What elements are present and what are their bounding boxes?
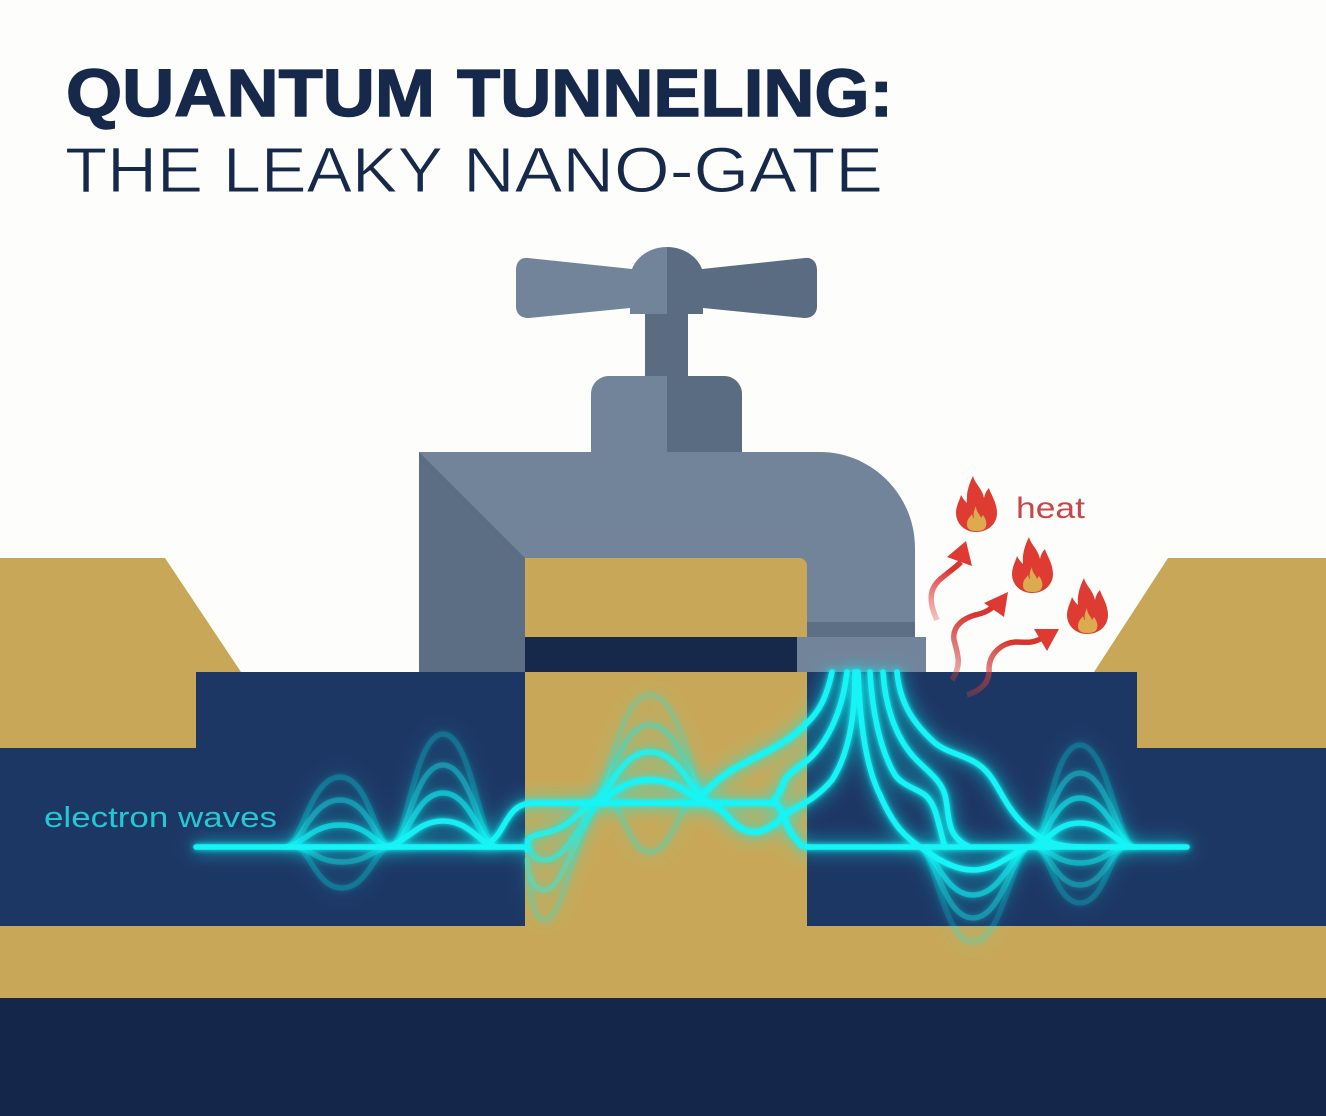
title line 2: THE [65,134,203,206]
gold layer [0,926,1326,998]
handle right [667,247,817,318]
label: electron waves: electron waves [44,802,277,834]
navy right region [807,672,1326,926]
bonnet [591,376,667,454]
right wave packet [807,745,1187,942]
heat arrows [931,541,1059,695]
title line 1: TUNNELING: [457,56,893,131]
bonnet shaded [667,376,742,454]
heat arrow 1 [931,541,972,620]
spout nozzle [797,637,926,672]
gold central barrier [525,672,807,926]
gate oxide slot [525,637,798,672]
heat arrow 2 [952,592,1008,680]
electron waves [196,672,1187,942]
icon: flame 2 [1012,537,1053,593]
heat arrow 3 [967,629,1059,695]
title line 2: NANO-GATE [463,134,883,206]
dark base layer [0,998,1326,1116]
title [65,56,893,206]
gold left contact [0,558,241,748]
substrate layers [0,558,1326,1116]
title line 1 [66,56,893,131]
title line 2: LEAKY [223,134,443,206]
handle left [516,247,667,318]
fan of leaking waves [700,672,1085,870]
faucet [419,247,926,672]
gold gate [525,558,807,637]
handle stem [645,312,688,378]
spout band [807,622,915,637]
flames [956,476,1108,634]
left wave packet [196,734,523,888]
body shaded corner [419,452,525,672]
icon: flame 1 [956,476,997,532]
navy left region [0,672,525,926]
gold right contact [1094,558,1326,748]
title line 2 [65,134,883,206]
tunnelling wave in barrier [490,695,772,920]
title line 1: QUANTUM [66,56,435,131]
icon: flame 3 [1067,578,1108,634]
label: heat: heat [1016,492,1086,525]
faucet body [419,452,915,672]
